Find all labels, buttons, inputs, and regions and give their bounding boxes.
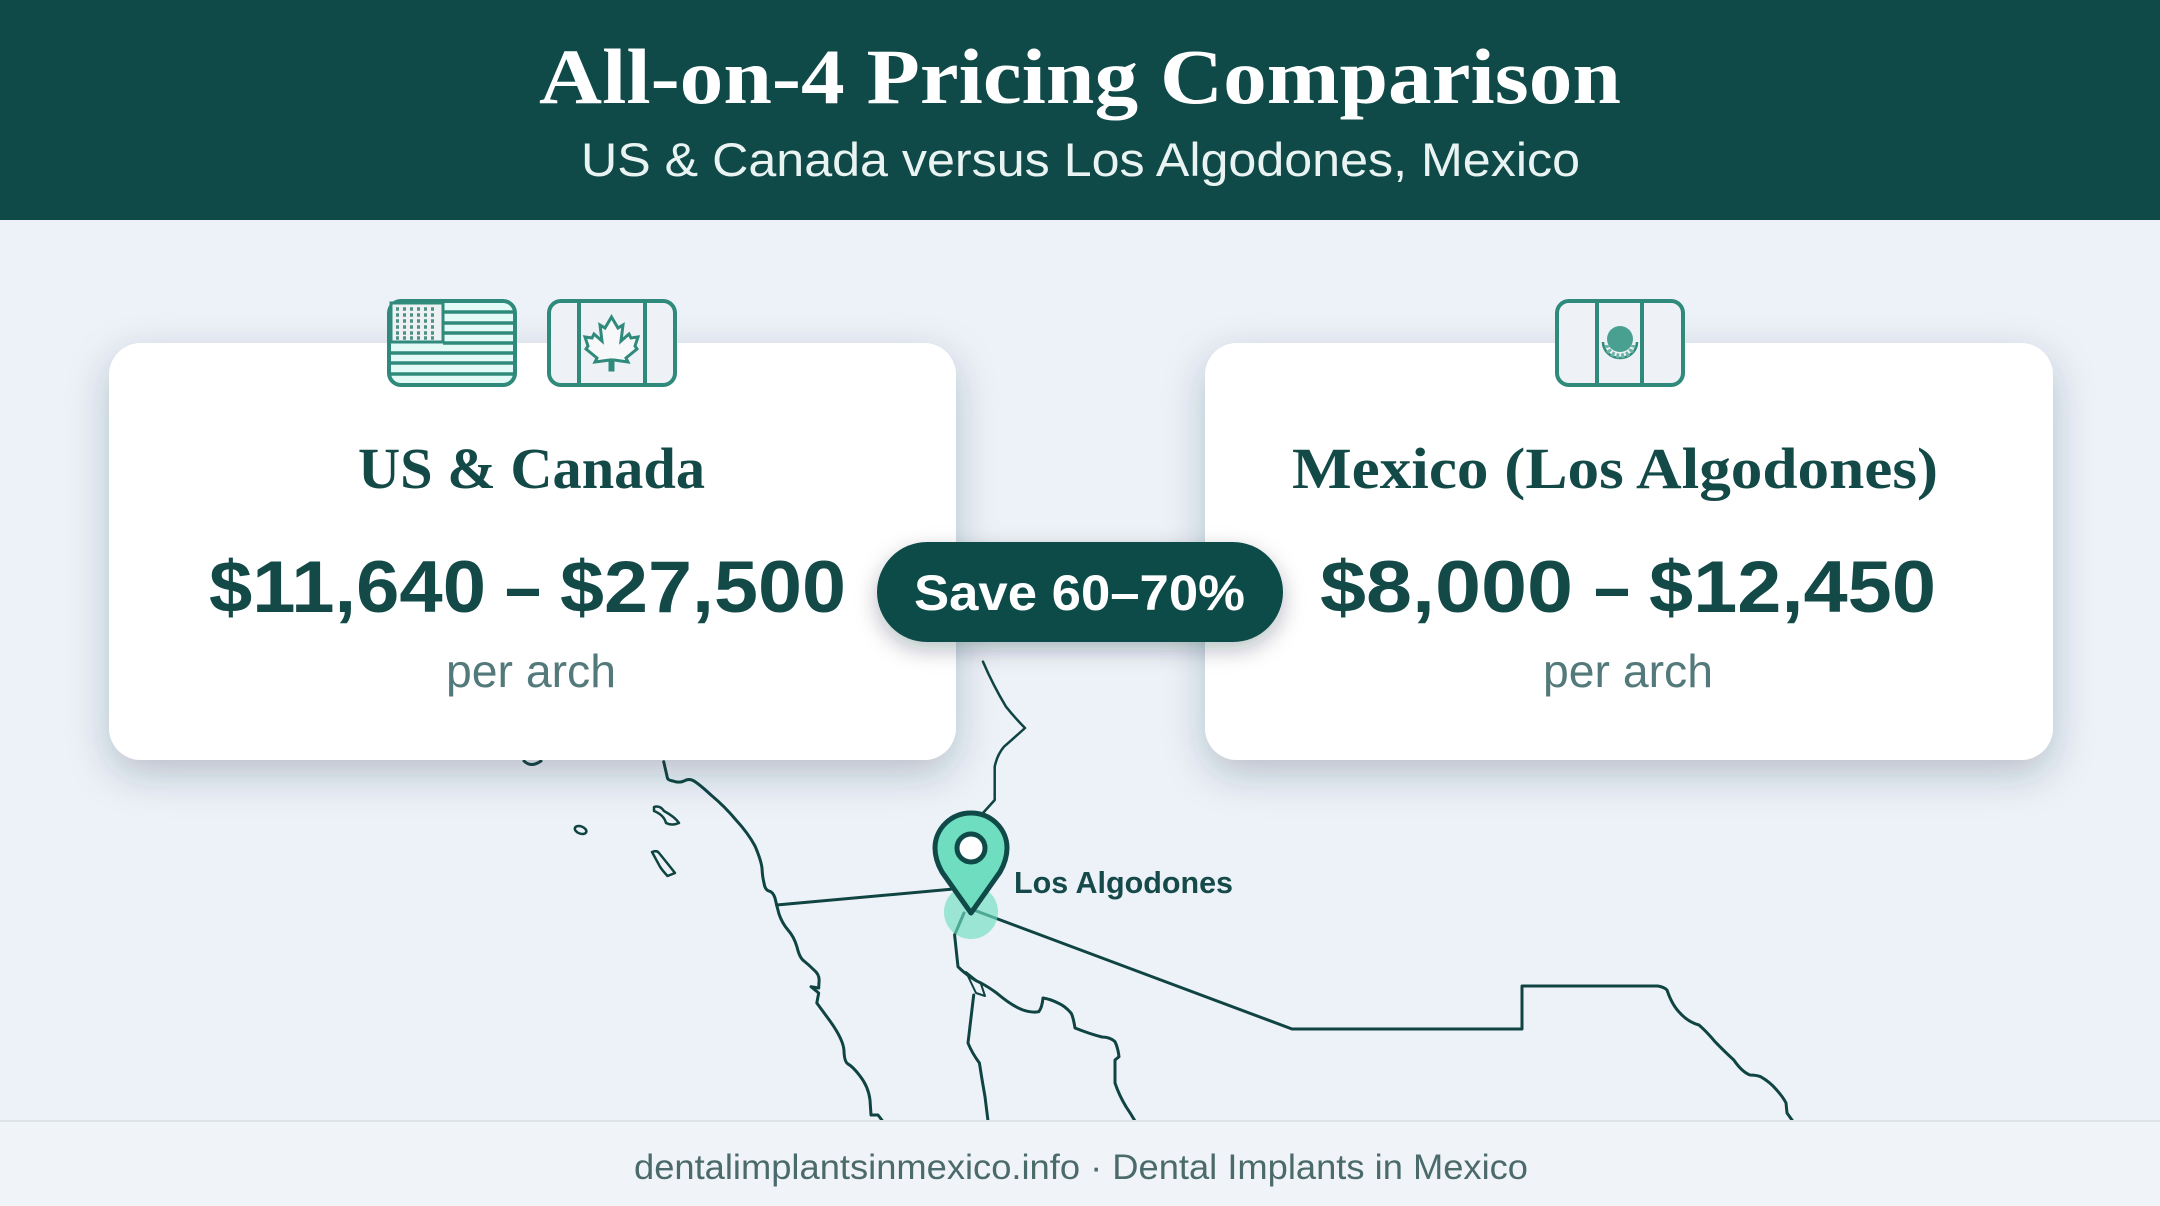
- price range: $27,500: [560, 547, 846, 628]
- map label: Los Algodones: Los Algodones: [1014, 865, 1233, 900]
- footer text: dentalimplantsinmexico.info · Dental Implants in Mexico: [634, 1148, 1528, 1187]
- price range: [209, 547, 846, 628]
- card background: [1205, 343, 2053, 760]
- price range: $12,450: [1649, 547, 1936, 628]
- title: All-on-4 Pricing Comparison: [539, 33, 1621, 120]
- icon: location pin: [935, 813, 1007, 939]
- price range: $8,000: [1320, 547, 1573, 628]
- panel: US & Canada: [109, 343, 956, 760]
- price range: $11,640: [209, 547, 486, 628]
- subtitle: US & Canada versus Los Algodones, Mexico: [581, 133, 1580, 186]
- callout: savings pill: Save 60–70%: [914, 565, 1245, 621]
- callout: savings pill: [877, 542, 1283, 642]
- price range: –: [505, 547, 541, 628]
- icon: Mexican flag: [1557, 301, 1683, 385]
- panel: Mexico: [1205, 343, 2053, 760]
- price range: [1320, 547, 1936, 628]
- card background: [109, 343, 956, 760]
- icon: Canadian flag: [549, 301, 675, 385]
- icon: US flag: [389, 301, 515, 385]
- price range: –: [1594, 547, 1630, 628]
- card heading: US & Canada: [358, 436, 705, 501]
- footer: [0, 1120, 2160, 1206]
- per arch label: per arch: [446, 645, 616, 697]
- per arch label: per arch: [1543, 645, 1713, 697]
- map: Baja California and US-Mexico border: [524, 662, 1793, 1121]
- header banner: [0, 0, 2160, 220]
- card heading: Mexico (Los Algodones): [1292, 436, 1938, 501]
